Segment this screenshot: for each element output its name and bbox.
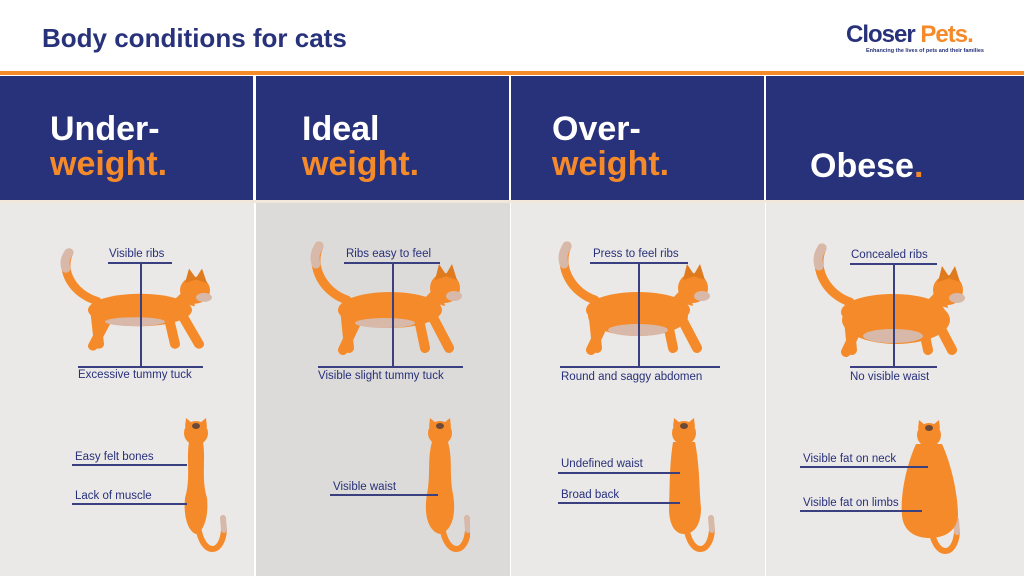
panel: underweight — [0, 76, 254, 576]
cat top: obese — [902, 420, 960, 554]
labels top underweight: Easy felt bones — [75, 451, 154, 463]
text: Broad back — [561, 489, 619, 501]
cat side: obese — [814, 244, 965, 357]
text: Visible slight tummy tuck — [318, 370, 444, 382]
cat side: underweight — [60, 248, 212, 350]
text: Lack of muscle — [75, 490, 152, 502]
cat side: overweight — [558, 242, 710, 355]
labels underweight: Visible ribs — [109, 248, 164, 260]
text: Round and saggy abdomen — [561, 371, 702, 383]
title: Body conditions for cats — [42, 23, 347, 53]
heading: overweight — [552, 110, 669, 183]
panel: obese — [766, 76, 1024, 576]
heading: obese: Obese. — [810, 147, 923, 185]
heading: underweight — [50, 110, 167, 183]
labels top obese: Visible fat on neck — [803, 453, 896, 465]
logo: Enhancing the lives of pets and their families — [866, 48, 984, 54]
heading: overweight: weight. — [552, 145, 669, 183]
text: Visible fat on limbs — [803, 497, 899, 509]
labels ideal: Ribs easy to feel — [346, 248, 431, 260]
labels top ideal: Visible waist — [333, 481, 396, 493]
cat top: ideal — [426, 418, 470, 552]
labels obese: Concealed ribs — [851, 249, 928, 261]
cat top: overweight — [669, 418, 715, 552]
panel: ideal — [256, 76, 510, 576]
heading: overweight: Over- — [552, 110, 641, 148]
heading: underweight: Under- — [50, 110, 160, 148]
labels top overweight: Undefined waist — [561, 458, 643, 470]
panel: overweight — [511, 76, 765, 576]
heading: ideal: Ideal — [302, 110, 379, 148]
labels overweight: Press to feel ribs — [593, 248, 679, 260]
text: Excessive tummy tuck — [78, 369, 192, 381]
cat top: underweight — [184, 418, 227, 552]
heading: ideal: weight. — [302, 145, 419, 183]
logo: Closer Pets. — [846, 21, 973, 48]
text: No visible waist — [850, 371, 929, 383]
cat side: ideal — [310, 242, 462, 355]
heading: ideal — [302, 110, 419, 183]
heading: underweight: weight. — [50, 145, 167, 183]
